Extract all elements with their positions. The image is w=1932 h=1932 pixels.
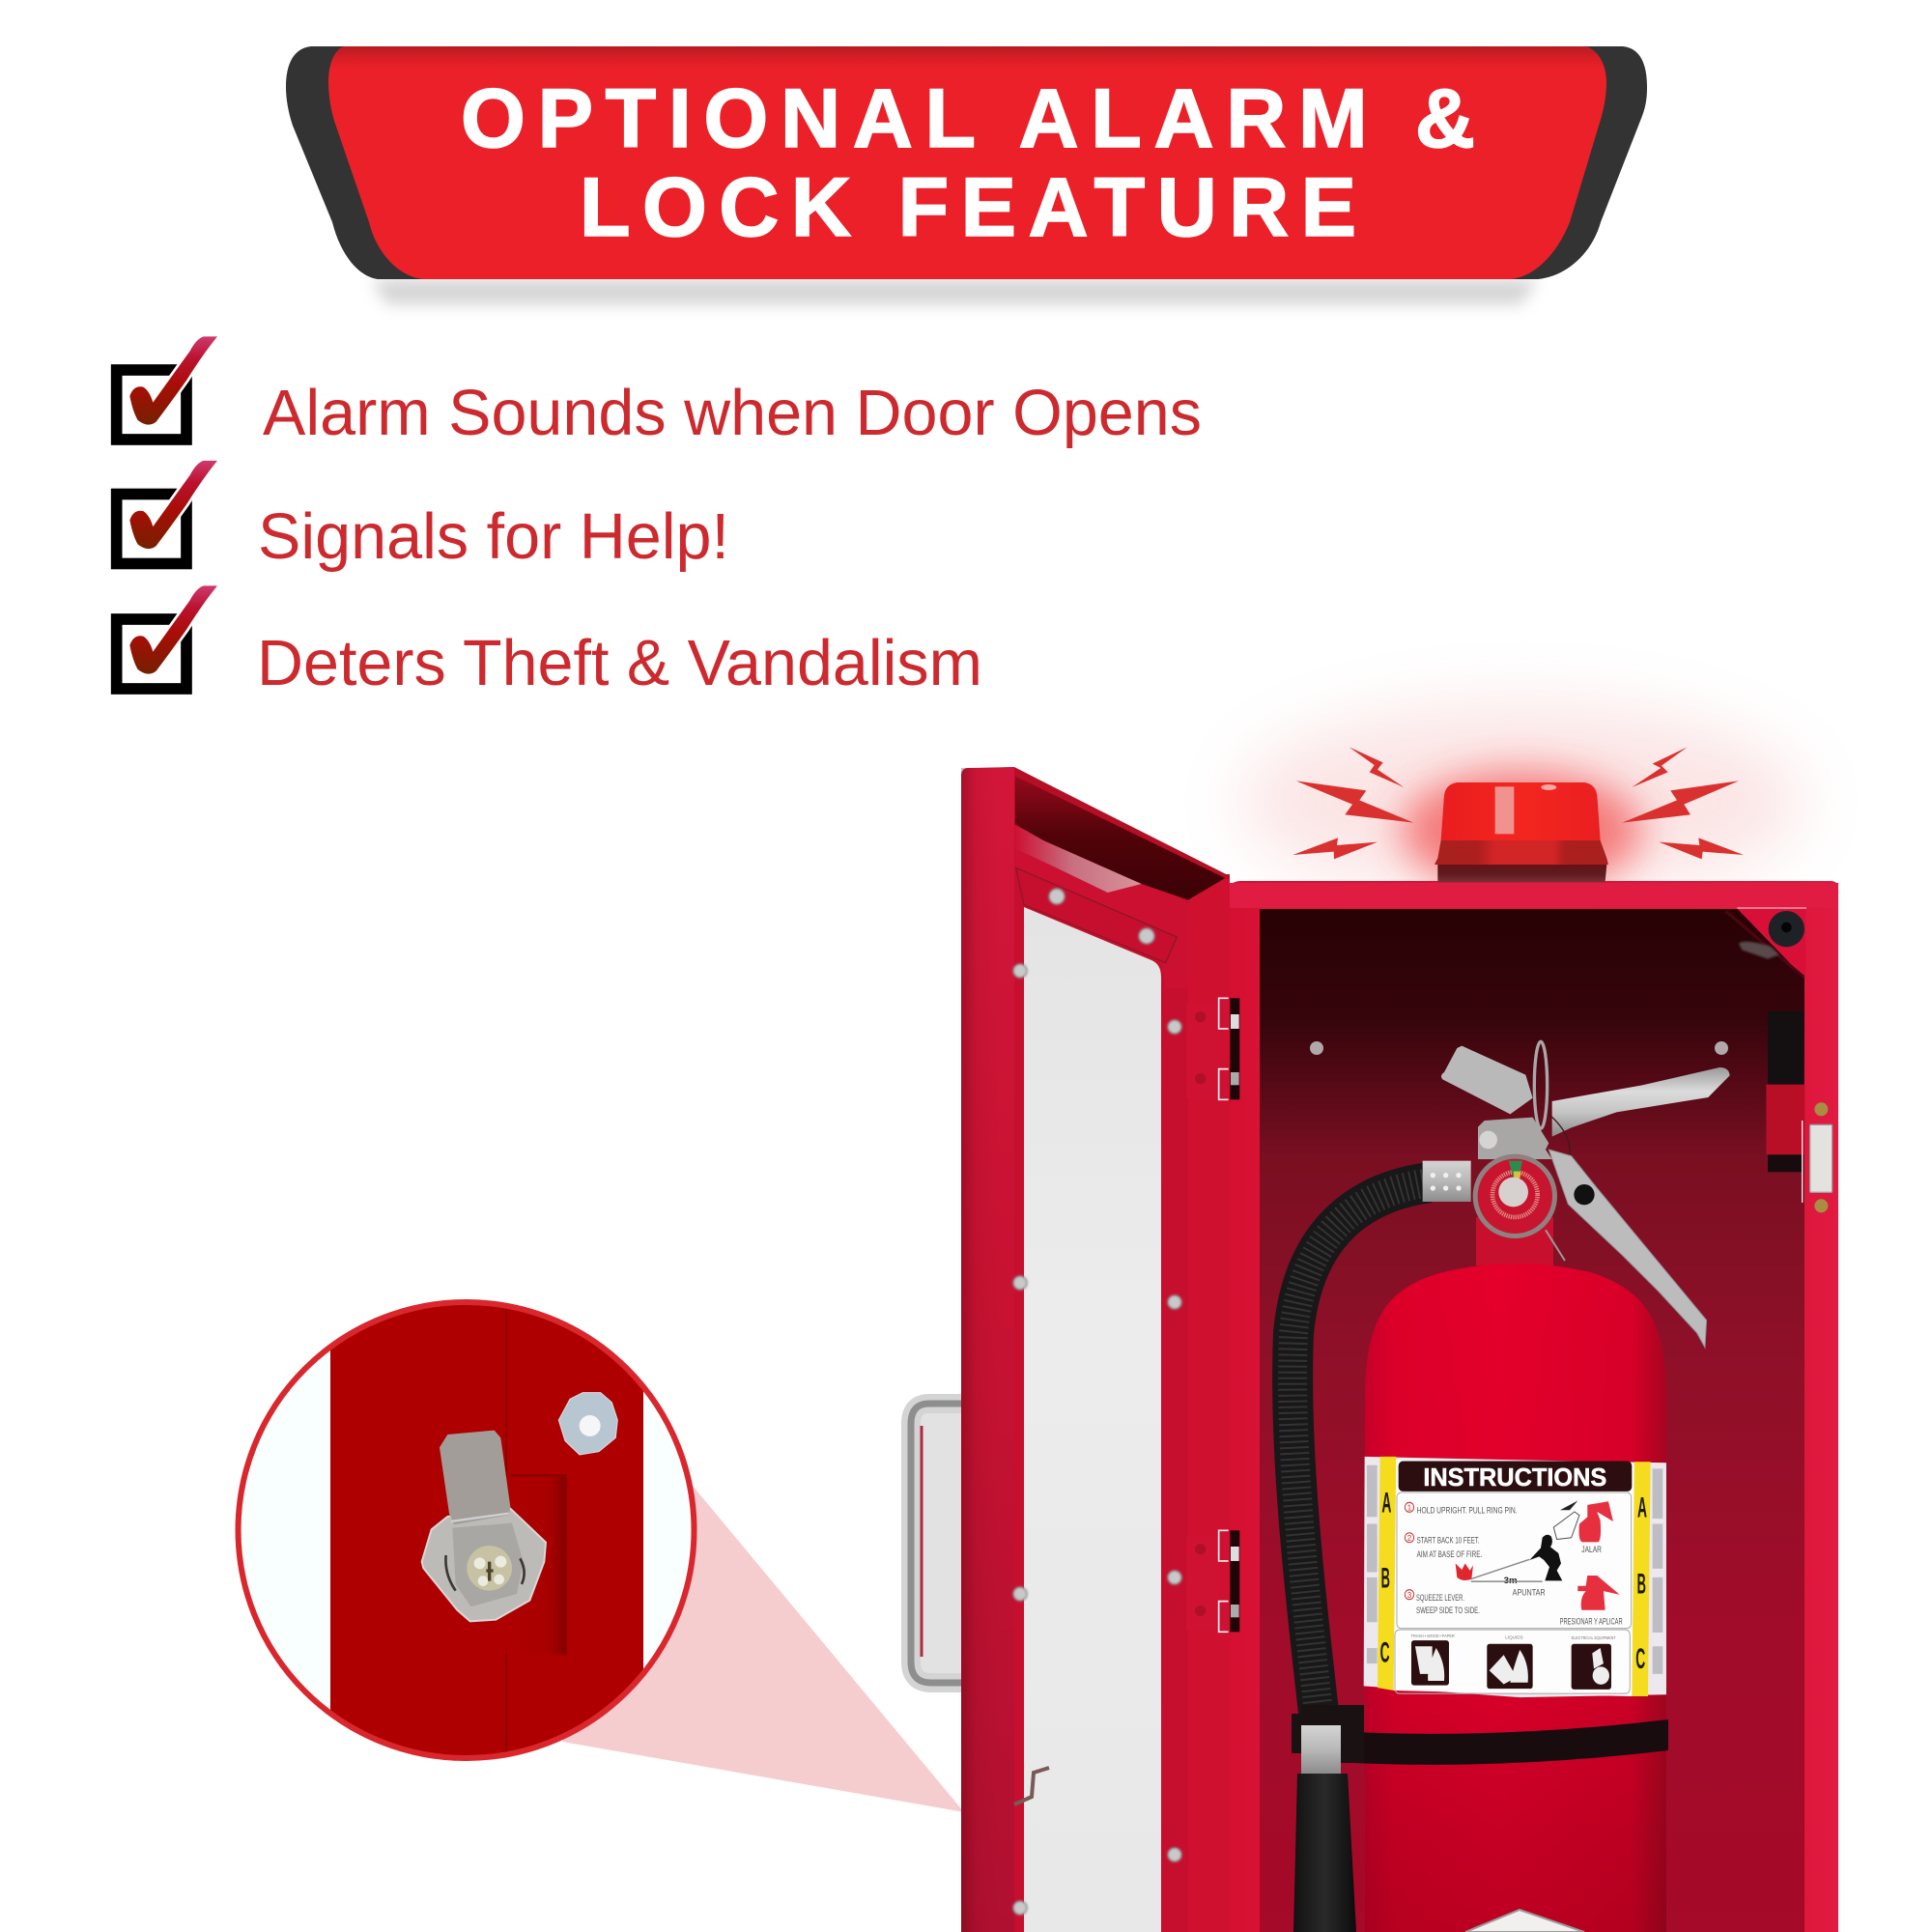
instruction steps: JALAR (1581, 1545, 1602, 1554)
checklist (117, 336, 1202, 699)
flame (1456, 1564, 1473, 1580)
check item 3 (117, 585, 982, 699)
pull tag (1441, 1046, 1533, 1114)
door window glass (1024, 907, 1161, 1932)
cabinet door handle (911, 1404, 974, 1683)
diamond certification badge (1465, 1910, 1584, 1932)
hose (1293, 1182, 1430, 1729)
fire extinguisher (1292, 1041, 1730, 1932)
banner dark wings (286, 46, 1647, 279)
letters A B C: B (1381, 1563, 1390, 1595)
retaining plate (1016, 867, 1177, 963)
cam inner plate (452, 1523, 524, 1606)
hinge upper (1186, 998, 1239, 1099)
door light line (1801, 1121, 1804, 1203)
lanyard wire (1548, 1114, 1570, 1154)
letters A B C: B (1637, 1568, 1646, 1600)
interior corner bracket (1737, 909, 1805, 980)
upper face (1015, 824, 1188, 988)
door body (962, 767, 1229, 1932)
dome reflection (1541, 784, 1556, 790)
alarm glow (1241, 705, 1802, 898)
instructions header (1399, 1461, 1632, 1492)
lower lever (1548, 1150, 1707, 1348)
cam lock body (422, 1509, 546, 1621)
gauge hub (1498, 1178, 1528, 1207)
cam latch (440, 1431, 510, 1524)
banner red face (328, 46, 1606, 279)
class captions: ELECTRICAL EQUIPMENT (1572, 1635, 1616, 1640)
checkbox icon 1 (117, 336, 217, 440)
hose ferrule (1301, 1725, 1341, 1774)
hose coupling (1423, 1161, 1471, 1202)
door top detail (1015, 768, 1229, 988)
instruction label (1364, 1457, 1666, 1697)
valve assembly (1423, 1041, 1730, 1348)
instruction steps: AIM AT BASE OF FIRE. (1417, 1549, 1482, 1559)
icon fire symbols (1415, 1646, 1609, 1685)
instructions white panel (1394, 1460, 1634, 1696)
instruction steps (1405, 1502, 1623, 1626)
panel outlines (1397, 1492, 1632, 1629)
mini extinguisher 1 (1579, 1501, 1613, 1542)
letters A B C: C (1380, 1637, 1390, 1669)
lock detail magnifier (238, 1285, 694, 1777)
hose clamp strap (1352, 1719, 1668, 1765)
banner shadow (372, 279, 1538, 304)
checkbox icon 2 (117, 461, 217, 563)
instruction label: A (1637, 1492, 1647, 1524)
checkbox icon 3 (117, 585, 217, 689)
hinge lower (1186, 1530, 1239, 1632)
pin wire (1546, 1230, 1565, 1261)
class captions: LIQUIDS (1505, 1634, 1523, 1639)
cabinet interior (1260, 909, 1804, 1932)
corner bumper knob (1769, 911, 1804, 947)
yellow ABC bars (1378, 1457, 1396, 1690)
instruction steps: HOLD UPRIGHT. PULL RING PIN. (1417, 1505, 1518, 1515)
lower door catch (1014, 1768, 1049, 1804)
instruction steps: 1 (1407, 1503, 1412, 1513)
instruction steps: START BACK 10 FEET. (1417, 1535, 1480, 1546)
banner title text (461, 72, 1475, 254)
cabinet top lip (1230, 883, 1838, 908)
magnifier background (240, 1303, 694, 1757)
switch box (1768, 1011, 1804, 1086)
instruction steps: SWEEP SIDE TO SIDE. (1416, 1605, 1480, 1615)
strobe alarm (1293, 747, 1744, 882)
interior fittings (1726, 908, 1833, 1212)
dark arcs (445, 1555, 525, 1591)
ring pin (1534, 1041, 1548, 1128)
gold screws (1814, 1102, 1828, 1116)
bracket foot (1768, 1154, 1802, 1172)
label paper (1364, 1457, 1666, 1697)
reflection on door (1015, 824, 1142, 893)
banner title text: OPTIONAL ALARM & (461, 72, 1475, 165)
item text 2: Signals for Help! (258, 500, 729, 573)
door screws (1013, 889, 1181, 1915)
red door section (330, 1285, 643, 1777)
item text 3: Deters Theft & Vandalism (257, 627, 982, 699)
instruction steps: 3 (1407, 1591, 1412, 1600)
hex nut (558, 1393, 617, 1455)
title banner (286, 46, 1647, 304)
hinge-side door strip (1188, 874, 1230, 1932)
door top return (1015, 768, 1229, 900)
door front strip (961, 767, 1014, 1932)
cabinet frame (1226, 881, 1838, 1932)
instruction steps: 3m (1504, 1576, 1518, 1585)
mini extinguisher 2 (1577, 1576, 1620, 1610)
instruction steps: PRESIONAR Y APLICAR (1560, 1616, 1623, 1626)
operator figure (1529, 1535, 1562, 1580)
letters A B C (1380, 1488, 1647, 1675)
cylinder (1365, 1264, 1666, 1932)
cylinder neck (1476, 1217, 1553, 1265)
lightning bolts (1293, 747, 1744, 859)
instruction steps: SQUEEZE LEVER. (1416, 1593, 1464, 1603)
spray line (1471, 1559, 1543, 1581)
letters A B C: C (1635, 1643, 1645, 1675)
instruction steps: APUNTAR (1513, 1587, 1546, 1598)
pressure gauge (1473, 1154, 1557, 1238)
alarm base (1437, 865, 1606, 882)
check item 1 (117, 336, 1202, 449)
valve head (1478, 1118, 1552, 1159)
alarm dome (1441, 782, 1601, 840)
door seam (505, 1294, 507, 1768)
red latch bracket (1766, 1085, 1804, 1154)
hose nozzle (1293, 1774, 1356, 1932)
side fine print (1367, 1465, 1662, 1674)
wall holes (1310, 1041, 1728, 1055)
class captions (1411, 1634, 1616, 1640)
gauge printing ring (1492, 1172, 1538, 1217)
check item 2 (117, 461, 729, 573)
item text 1: Alarm Sounds when Door Opens (263, 377, 1202, 449)
dome highlight (1495, 786, 1514, 834)
instruction label: INSTRUCTIONS (1423, 1463, 1606, 1492)
upper lever (1552, 1067, 1730, 1137)
banner title text: LOCK FEATURE (580, 161, 1356, 254)
zoom callout wedge (562, 1480, 964, 1812)
magnifier ring (238, 1302, 694, 1758)
strike plate (1810, 1124, 1833, 1192)
class icons (1411, 1640, 1611, 1690)
gauge dial colors (1509, 1161, 1522, 1179)
class captions: TRASH • WOOD • PAPER (1411, 1634, 1455, 1638)
door slot (551, 1476, 567, 1656)
bracket clip (1739, 942, 1779, 959)
alarm lower band (1435, 840, 1608, 865)
lock close-up (422, 1393, 617, 1655)
letters A B C: A (1381, 1488, 1391, 1520)
instruction steps: 2 (1407, 1534, 1412, 1543)
open cabinet door (961, 767, 1239, 1932)
lock screw (467, 1546, 512, 1591)
strap bracket (1292, 1705, 1364, 1763)
lever pivot (1574, 1184, 1595, 1205)
